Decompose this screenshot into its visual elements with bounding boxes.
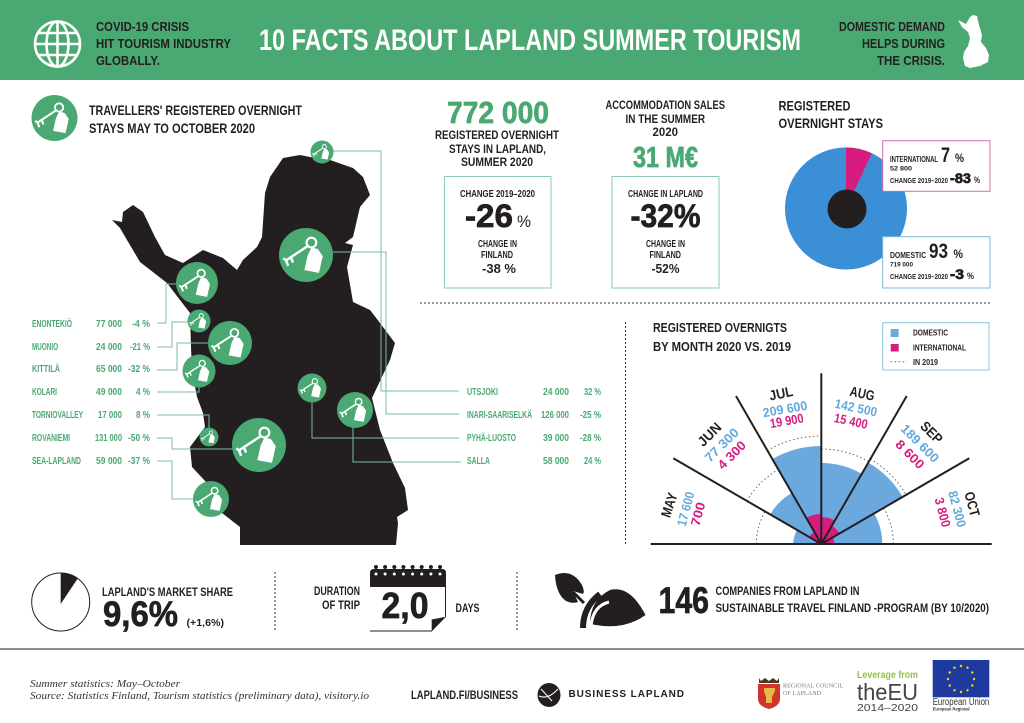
left destination table: 49 000 xyxy=(96,386,122,398)
callout: domestic xyxy=(883,237,990,288)
header left text: COVID-19 CRISIS xyxy=(96,19,189,34)
left destination table: ROVANIEMI xyxy=(32,432,70,444)
left destination table: KOLARI xyxy=(32,386,57,398)
change box xyxy=(444,176,551,288)
logo: Regional Council of Lapland: OF LAPLAND xyxy=(783,691,822,697)
market share change: (+1,6%) xyxy=(186,618,224,629)
heading: REGISTERED OVERNIGTS xyxy=(653,320,787,335)
change box xyxy=(612,176,719,288)
left destination table: 65 000 xyxy=(96,363,122,375)
left destination table: 24 000 xyxy=(96,341,122,353)
month labels: 77 300 xyxy=(702,425,742,465)
left destination table: -37 % xyxy=(128,455,151,467)
duration label xyxy=(314,584,360,612)
legend: INTERNATIONAL xyxy=(913,344,966,352)
left destination table: SEA-LAPLAND xyxy=(32,455,81,467)
left destination table: -50 % xyxy=(128,432,151,444)
left destination table: 77 000 xyxy=(96,318,122,330)
logo: Leverage from the EU: theEU xyxy=(857,679,918,705)
section: travellers map xyxy=(32,95,602,545)
logo: European Union flag: European Union xyxy=(933,697,989,708)
source note: Source: Statistics Finland, Tourism statistics (preliminary data), visitory.io xyxy=(30,690,370,702)
description: IN THE SUMMER xyxy=(626,112,705,126)
month labels: 15 400 xyxy=(833,410,869,432)
key marker: Muonio xyxy=(188,310,210,332)
left destination table: 59 000 xyxy=(96,455,122,467)
key marker: Pyhä-Luosto xyxy=(298,374,326,402)
month labels: 4 300 xyxy=(714,438,749,472)
icon: Finland silhouette xyxy=(958,15,989,68)
panel: registered overnight stays pie xyxy=(778,98,990,288)
key marker: Kittilä xyxy=(208,321,252,365)
duration value: 2,0 xyxy=(382,585,428,626)
month labels: 142 500 xyxy=(833,396,879,420)
legend xyxy=(883,323,989,370)
header left text: HIT TOURISM INDUSTRY xyxy=(96,36,231,51)
footer xyxy=(30,660,989,714)
icon: globe xyxy=(35,22,80,66)
month labels: JUN xyxy=(694,419,725,450)
logo: Regional Council of Lapland xyxy=(758,678,843,709)
left destination table: MUONIO xyxy=(32,341,58,353)
logo: Leverage from the EU xyxy=(857,670,919,714)
callout: domestic: % xyxy=(967,271,974,281)
section icon: key xyxy=(32,95,78,141)
logo: European Union flag: European Regional xyxy=(933,706,970,712)
right destination table: INARI-SAARISELKÄ xyxy=(467,408,532,421)
month labels: 700 xyxy=(688,500,708,528)
right destination table: 24 000 xyxy=(543,386,569,398)
left destination table: -4 % xyxy=(132,318,151,330)
callout: domestic: 93 xyxy=(929,240,948,263)
logo: Leverage from the EU: Leverage from xyxy=(857,670,918,681)
callout: international xyxy=(883,141,990,191)
callout: domestic: -3 xyxy=(950,266,964,282)
month labels: 17 600 xyxy=(674,490,697,528)
header right text: HELPS DURING xyxy=(862,36,945,51)
description: ACCOMMODATION SALES xyxy=(606,98,725,112)
right destination table: 126 000 xyxy=(541,409,569,421)
month labels: MAY xyxy=(658,490,681,519)
left destination table: ENONTEKIÖ xyxy=(32,317,72,330)
icon: leaf sprout xyxy=(555,573,646,628)
callout: international: INTERNATIONAL xyxy=(890,155,938,164)
callout: international: % xyxy=(955,151,964,165)
duration label: DURATION xyxy=(314,584,360,598)
right destination table: 24 % xyxy=(584,455,601,467)
connector lines xyxy=(157,151,461,499)
key marker: Utsjoki xyxy=(310,140,334,164)
heading: REGISTERED xyxy=(778,98,850,114)
right destination table: 32 % xyxy=(584,386,601,398)
change box: CHANGE IN xyxy=(478,239,517,250)
map heading: TRAVELLERS' REGISTERED OVERNIGHT xyxy=(89,102,302,118)
panel: duration of trip xyxy=(314,565,480,632)
polar area chart xyxy=(651,373,992,544)
description: REGISTERED OVERNIGHT xyxy=(435,128,560,142)
change box: FINLAND xyxy=(650,250,681,261)
heading xyxy=(778,98,883,131)
key marker: Enontekiö xyxy=(176,262,218,304)
callout: international: 52 800 xyxy=(890,166,913,172)
callout: international: 7 xyxy=(941,144,950,167)
month labels xyxy=(658,383,983,529)
callout: domestic: 719 000 xyxy=(890,262,914,268)
change box: CHANGE IN LAPLAND xyxy=(628,189,703,200)
source note xyxy=(30,678,370,702)
logo: Business Lapland: BUSINESS LAPLAND xyxy=(568,689,684,700)
panel: market share xyxy=(32,573,233,634)
left destination table: -32 % xyxy=(128,363,151,375)
domestic sectors xyxy=(770,446,903,544)
right destination table: PYHÄ-LUOSTO xyxy=(467,431,516,444)
left destination table: TORNIOVALLEY xyxy=(32,409,83,421)
change box: -38 % xyxy=(482,261,516,276)
days label: DAYS xyxy=(456,601,480,615)
right destination table: -25 % xyxy=(580,409,602,421)
key marker: Salla xyxy=(337,392,373,428)
month labels: 19 900 xyxy=(769,410,805,431)
right destination table: UTSJOKI xyxy=(467,386,498,398)
description: 2020 xyxy=(652,125,678,139)
international sectors xyxy=(806,514,840,544)
source note: Summer statistics: May–October xyxy=(30,678,181,690)
description xyxy=(606,98,725,139)
month labels: 3 800 xyxy=(932,496,954,529)
key marker: Tornio Valley xyxy=(200,428,218,446)
left destination table: 4 % xyxy=(136,386,151,398)
spokes and baseline xyxy=(651,373,992,544)
big number 146: 146 xyxy=(658,580,709,621)
legend: DOMESTIC xyxy=(913,328,948,338)
callout: international: -83 xyxy=(950,170,971,186)
map heading: STAYS MAY TO OCTOBER 2020 xyxy=(89,120,255,136)
right destination table: 39 000 xyxy=(543,432,569,444)
month labels: 82 300 xyxy=(945,489,969,529)
icon: calendar xyxy=(370,565,446,632)
right destination table: SALLA xyxy=(467,455,490,467)
description: SUMMER 2020 xyxy=(461,155,533,169)
legend: IN 2019 xyxy=(913,358,938,367)
heading: BY MONTH 2020 VS. 2019 xyxy=(653,339,791,354)
month labels: SEP xyxy=(917,418,946,447)
change box: FINLAND xyxy=(481,250,513,261)
market share label: LAPLAND'S MARKET SHARE xyxy=(102,585,233,599)
logo: Business Lapland xyxy=(538,683,684,707)
month labels: 189 600 xyxy=(898,421,942,466)
key marker: Rovaniemi xyxy=(232,418,286,472)
callout: international: CHANGE 2019–2020 xyxy=(890,178,948,185)
market share pie xyxy=(32,573,90,631)
header band xyxy=(0,0,1024,80)
map heading xyxy=(89,102,302,136)
key marker: Sea-Lapland xyxy=(193,481,229,517)
callout: international: % xyxy=(974,175,980,185)
panel: registered overnight stays total xyxy=(435,95,560,288)
change box: -26 xyxy=(465,198,513,234)
change box: -52% xyxy=(652,261,680,276)
left destination table xyxy=(32,317,151,467)
heading: OVERNIGHT STAYS xyxy=(778,115,883,131)
change box: % xyxy=(517,212,531,231)
big number 31 M€: 31 M€ xyxy=(633,142,698,174)
month labels: AUG xyxy=(848,383,876,404)
title: 10 FACTS ABOUT LAPLAND SUMMER TOURISM xyxy=(259,24,801,57)
change box: -32% xyxy=(630,198,700,234)
logo: Leverage from the EU: 2014–2020 xyxy=(857,703,919,714)
header left text: GLOBALLY. xyxy=(96,53,160,68)
month labels: 209 600 xyxy=(762,398,808,420)
website: LAPLAND.FI/BUSINESS xyxy=(411,688,518,702)
duration label: OF TRIP xyxy=(322,598,360,612)
left destination table: 8 % xyxy=(136,409,151,421)
map of Lapland xyxy=(112,155,408,545)
market share value: 9,6% xyxy=(103,595,178,634)
heading xyxy=(653,320,791,354)
month labels: 8 600 xyxy=(892,437,928,472)
callout: domestic: CHANGE 2019–2020 xyxy=(890,274,948,281)
description xyxy=(716,584,989,615)
panel: overnights by month xyxy=(651,320,992,544)
header right text xyxy=(839,19,945,68)
pie chart xyxy=(785,147,907,270)
change box: CHANGE IN xyxy=(646,239,685,250)
right destination table xyxy=(467,386,602,467)
key marker: Kolari xyxy=(182,354,216,388)
change box: CHANGE 2019–2020 xyxy=(460,189,535,200)
logo: Regional Council of Lapland: REGIONAL COUNCIL xyxy=(783,684,843,690)
month labels: OCT xyxy=(961,490,983,519)
key marker: Inari-Saariselkä xyxy=(279,228,333,282)
header left text xyxy=(96,19,231,68)
month labels: JUL xyxy=(768,383,795,404)
left destination table: 17 000 xyxy=(98,409,122,421)
big number 772 000: 772 000 xyxy=(447,95,549,130)
panel: sustainable travel xyxy=(555,573,989,628)
logo: European Union flag xyxy=(933,660,989,712)
callout: domestic: DOMESTIC xyxy=(890,251,926,260)
panel: accommodation sales xyxy=(606,98,725,288)
callout: domestic: % xyxy=(954,247,963,261)
description xyxy=(435,128,560,169)
right destination table: 58 000 xyxy=(543,455,569,467)
header right text: DOMESTIC DEMAND xyxy=(839,19,945,34)
left destination table: -21 % xyxy=(130,341,150,353)
left destination table: 131 000 xyxy=(95,432,122,444)
header right text: THE CRISIS. xyxy=(877,53,945,68)
right destination table: -28 % xyxy=(580,432,602,444)
description: STAYS IN LAPLAND, xyxy=(449,142,546,156)
left destination table: KITTILÄ xyxy=(32,362,60,375)
description: COMPANIES FROM LAPLAND IN xyxy=(716,584,860,598)
2019 dotted arcs xyxy=(747,436,906,544)
